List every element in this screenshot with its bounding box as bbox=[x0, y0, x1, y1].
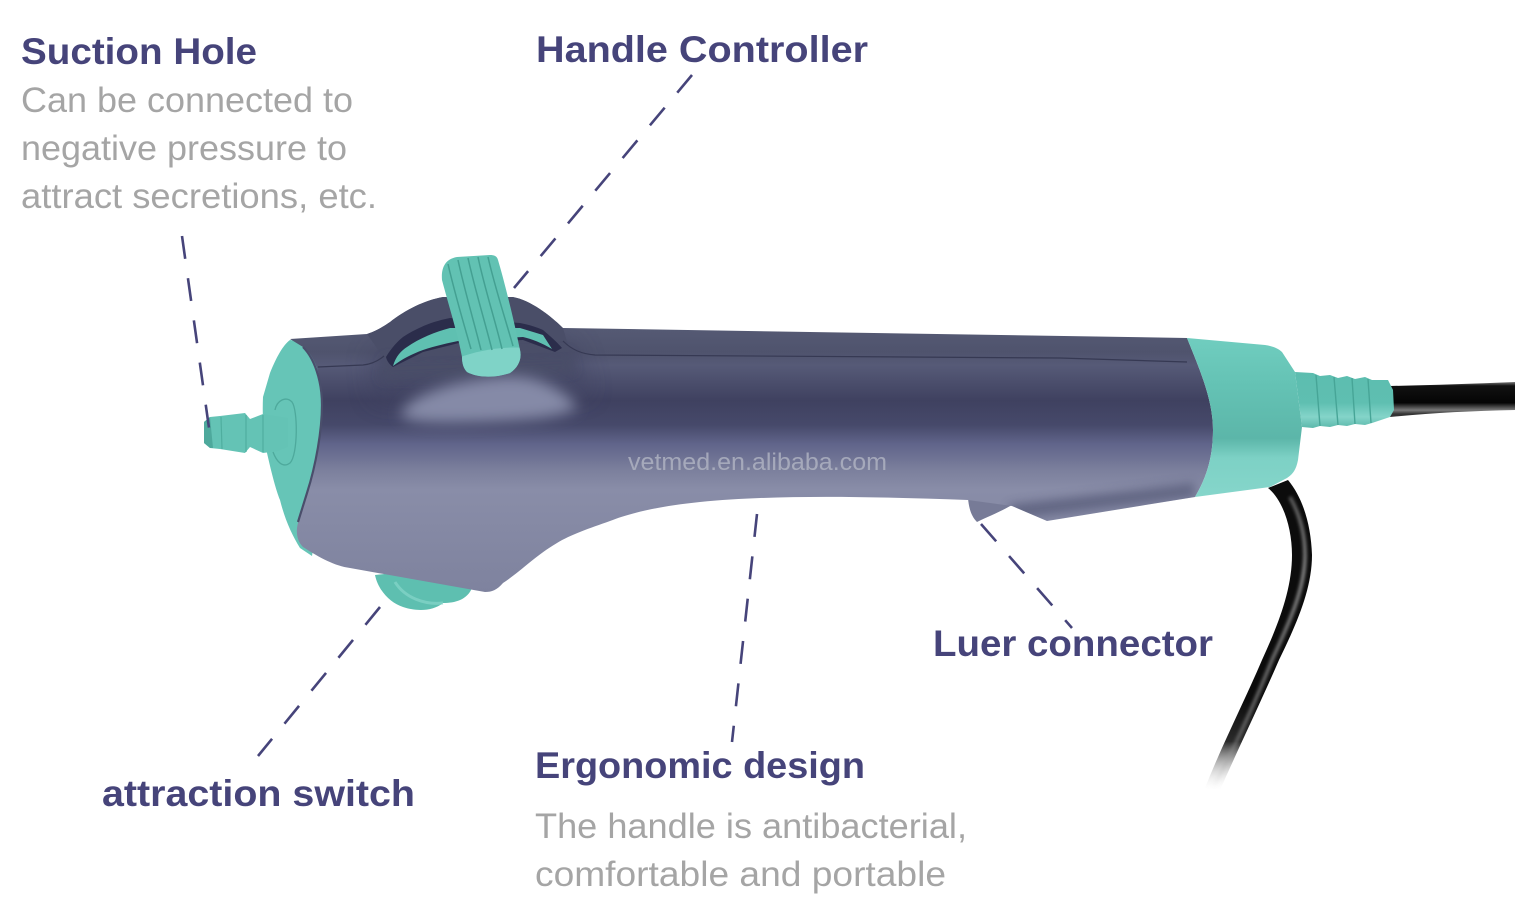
watermark: vetmed.en.alibaba.com bbox=[628, 449, 887, 476]
suction barbed nozzle bbox=[204, 413, 288, 453]
lower right rim shade bbox=[1010, 490, 1195, 512]
callout: luer connector: Luer connector bbox=[933, 623, 1213, 664]
rear teal collar bbox=[1187, 338, 1302, 497]
bump top darkening bbox=[374, 364, 580, 368]
suction port ring bbox=[273, 399, 296, 465]
teal slot inner bbox=[393, 328, 552, 366]
leader line: ergonomic design bbox=[732, 514, 757, 742]
front teal face plate bbox=[263, 340, 330, 556]
callout: suction hole: Can be connected to bbox=[21, 81, 353, 120]
leader line: suction hole bbox=[182, 236, 209, 428]
thumb lever bbox=[442, 255, 525, 380]
callout: ergonomic design: comfortable and portable bbox=[535, 855, 946, 894]
rear barbed connector bbox=[1295, 372, 1394, 428]
callout: ergonomic design: The handle is antibacterial, bbox=[535, 807, 967, 846]
seam line bbox=[318, 341, 1187, 367]
lower slot lip bbox=[380, 352, 575, 380]
arc cover over slot bbox=[368, 297, 564, 337]
leader line: luer connector bbox=[981, 524, 1072, 628]
bottom attraction switch wheel bbox=[375, 570, 472, 610]
callout: suction hole bbox=[21, 31, 377, 216]
callout: ergonomic design bbox=[535, 745, 967, 894]
callout: suction hole: attract secretions, etc. bbox=[21, 177, 377, 216]
cable: lower black tube bbox=[1205, 480, 1312, 790]
cable: upper black tube bbox=[1390, 382, 1515, 417]
callout: attraction switch: attraction switch bbox=[102, 773, 415, 814]
callout: ergonomic design: Ergonomic design bbox=[535, 745, 865, 786]
dark slot recess bbox=[386, 318, 562, 367]
callout: handle controller: Handle Controller bbox=[536, 29, 868, 70]
trigger / luer port bbox=[968, 498, 1012, 522]
leader line: handle controller bbox=[514, 75, 692, 288]
callout: suction hole: negative pressure to bbox=[21, 129, 347, 168]
leader line: attraction switch bbox=[258, 607, 380, 756]
front face edge bbox=[298, 347, 322, 522]
callout: suction hole: Suction Hole bbox=[21, 31, 257, 72]
thumb bump highlight bbox=[400, 376, 578, 423]
handle body bbox=[280, 290, 1220, 600]
